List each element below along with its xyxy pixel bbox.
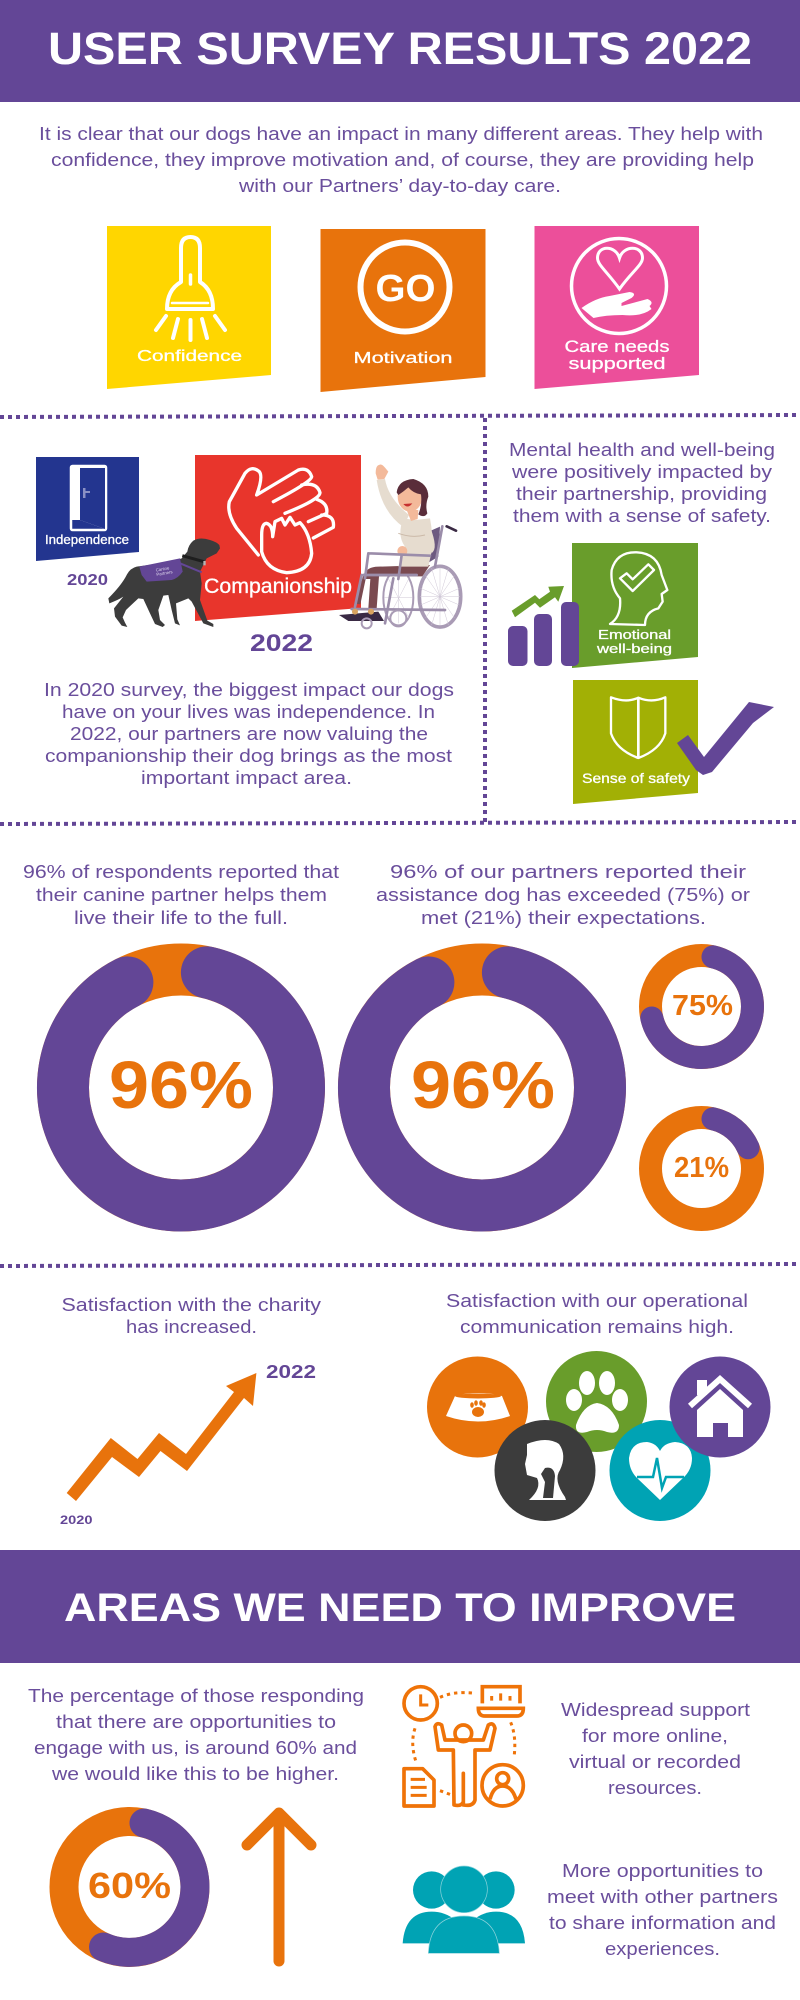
icon cluster: communication circles — [427, 1351, 770, 1521]
intro text: confidence, they improve motivation and, of course, they are providing help — [51, 150, 754, 170]
text: online resources support: for more online, — [582, 1726, 728, 1746]
icon: go circle — [360, 242, 450, 332]
icon: torch — [156, 237, 225, 340]
panel: care needs flag — [534, 226, 699, 389]
independence to companionship text: companionship their dog brings as the most — [45, 746, 452, 766]
chart: rising arrow 2020 to 2022 — [60, 1362, 316, 1527]
text: helps live life to the full — [23, 862, 339, 928]
icon: paw — [546, 1351, 647, 1452]
text: opportunities to engage: that there are opportunities to — [56, 1712, 336, 1732]
mental health text: their partnership, providing — [516, 484, 767, 504]
icon: up arrow — [247, 1813, 311, 1961]
illustration: dog in vest: Canine — [155, 565, 170, 573]
icon: heart with pulse — [610, 1420, 710, 1521]
text: online resources support: Widespread support — [561, 1700, 750, 1720]
text: online resources support: virtual or recorded — [569, 1752, 741, 1772]
text: meet other partners: More opportunities to — [562, 1861, 763, 1881]
text: meet other partners: meet with other partners — [547, 1887, 778, 1907]
mental health text — [509, 440, 775, 526]
independence to companionship text: 2022, our partners are now valuing the — [70, 724, 428, 744]
independence to companionship text: In 2020 survey, the biggest impact our dogs — [44, 680, 454, 700]
text: opportunities to engage: engage with us, is around 60% and — [34, 1738, 357, 1758]
intro text: with our Partners’ day-to-day care. — [238, 176, 561, 196]
panel: sense of safety flag — [573, 680, 698, 804]
mental health text: them with a sense of safety. — [513, 506, 771, 526]
icon: shield — [611, 697, 665, 758]
year 2020 label: 2020 — [67, 572, 108, 589]
independence to companionship text: important impact area. — [141, 768, 352, 788]
panel: companionship flag: Companionship — [204, 575, 352, 598]
icon: rising bars with arrow — [508, 586, 579, 666]
donut chart: 96% left — [63, 970, 299, 1206]
text: helps live life to the full: their canine partner helps them — [36, 885, 327, 905]
chart: rising arrow 2020 to 2022: 2022 — [266, 1362, 316, 1382]
icon: head with tick — [610, 552, 667, 625]
text: helps live life to the full: 96% of respondents reported that — [23, 862, 339, 882]
mental health text: Mental health and well-being — [509, 440, 775, 460]
text: meet other partners — [547, 1861, 778, 1959]
text: helps live life to the full: live their life to the full. — [74, 908, 288, 928]
panel: care needs flag: supported — [568, 354, 666, 373]
text: satisfaction with charity — [62, 1295, 321, 1337]
text: meet other partners: to share information and — [549, 1913, 776, 1933]
panel: sense of safety flag: Sense of safety — [582, 770, 690, 786]
illustration: dog in vest: Partners — [156, 569, 173, 577]
donut chart: 75%: 75% — [672, 990, 733, 1022]
donut chart: 96% right: 96% — [411, 1048, 555, 1123]
text: satisfaction with charity: Satisfaction with the charity — [62, 1295, 321, 1315]
panel: independence flag — [36, 457, 139, 561]
independence to companionship text — [44, 680, 454, 788]
text: opportunities to engage: we would like this to be higher. — [51, 1764, 339, 1784]
text: meet other partners: experiences. — [605, 1939, 720, 1959]
icon: purple tick — [677, 702, 774, 775]
text: exceeded or met expectations: assistance dog has exceeded (75%) or — [376, 885, 750, 905]
text: exceeded or met expectations: met (21%) their expectations. — [421, 908, 706, 928]
illustration: woman in wheelchair — [339, 465, 461, 628]
title banner — [0, 0, 800, 102]
intro text — [39, 124, 763, 196]
donut chart: 60%: 60% — [88, 1865, 171, 1906]
section banner: areas to improve — [0, 1550, 800, 1663]
icon: heart and hand — [572, 238, 666, 334]
intro text: It is clear that our dogs have an impact in many different areas. They help with — [39, 124, 763, 144]
donut chart: 75% — [650, 956, 752, 1058]
icon: dog bowl — [427, 1356, 528, 1458]
text: operational communication: communication remains high. — [460, 1317, 734, 1337]
panel: emotional well-being flag: well-being — [596, 641, 672, 656]
section banner: areas to improve: AREAS WE NEED TO IMPROVE — [64, 1586, 736, 1630]
donut chart: 21%: 21% — [674, 1152, 729, 1184]
year 2022 label: 2022 — [250, 630, 313, 657]
icon: person and dog silhouette — [494, 1420, 596, 1521]
panel: confidence flag — [107, 226, 271, 389]
illustration: dog in vest — [108, 538, 220, 627]
panel: care needs flag: Care needs — [564, 337, 670, 356]
icon: house — [670, 1356, 770, 1458]
donut chart: 21% — [650, 1118, 752, 1220]
icon: clasped hands — [229, 469, 334, 573]
panel: independence flag: Independence — [45, 532, 129, 547]
panel: confidence flag: Confidence — [137, 348, 242, 365]
icon: online resources person — [404, 1687, 523, 1806]
text: opportunities to engage — [28, 1686, 364, 1784]
donut chart: 60% — [64, 1822, 195, 1952]
text: satisfaction with charity: has increased. — [126, 1317, 257, 1337]
donut chart: 96% right — [364, 970, 600, 1206]
icon: go circle: GO — [376, 268, 436, 310]
panel: emotional well-being flag: Emotional — [598, 627, 671, 642]
text: exceeded or met expectations — [376, 862, 750, 928]
icon: door — [71, 466, 106, 530]
icon: group of people — [403, 1866, 525, 1953]
text: online resources support: resources. — [608, 1778, 702, 1798]
mental health text: were positively impacted by — [511, 462, 772, 482]
panel: motivation flag: Motivation — [354, 350, 452, 367]
text: exceeded or met expectations: 96% of our partners reported their — [390, 862, 746, 882]
panel: companionship flag — [195, 455, 361, 621]
independence to companionship text: have on your lives was independence. In — [62, 702, 435, 722]
title banner: USER SURVEY RESULTS 2022 — [48, 23, 752, 74]
panel: emotional well-being flag — [572, 543, 698, 668]
text: operational communication: Satisfaction with our operational — [446, 1291, 748, 1311]
text: online resources support — [561, 1700, 750, 1798]
donut chart: 96% left: 96% — [109, 1048, 253, 1123]
panel: motivation flag — [320, 229, 486, 392]
chart: rising arrow 2020 to 2022: 2020 — [60, 1513, 93, 1527]
text: operational communication — [446, 1291, 748, 1337]
text: opportunities to engage: The percentage of those responding — [28, 1686, 364, 1706]
